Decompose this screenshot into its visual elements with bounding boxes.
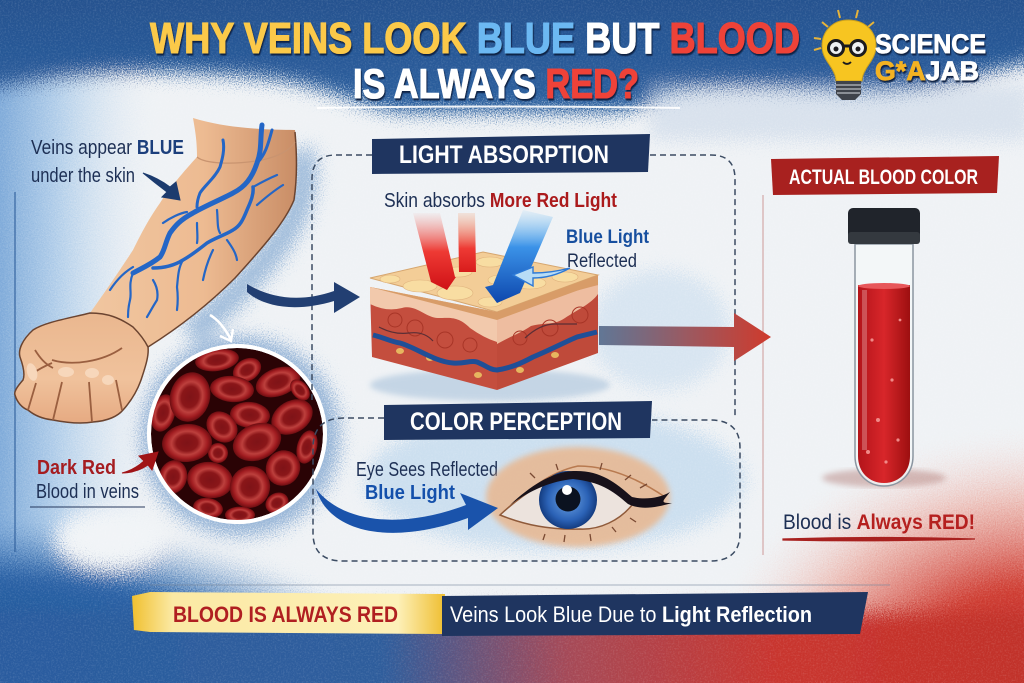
banner: yellow (132, 592, 445, 634)
logo text: G*AJAB (875, 56, 979, 86)
text: eye sees: Eye Sees Reflected (356, 459, 498, 481)
logo text (875, 29, 986, 86)
heading: color perception: COLOR PERCEPTION (410, 408, 622, 436)
icon: fist (15, 313, 148, 423)
heading: color perception (384, 401, 652, 440)
icon: test tube (822, 208, 946, 487)
logo text: SCIENCE (875, 29, 986, 59)
arrow: to veins (143, 173, 180, 200)
icon: forearm (15, 118, 296, 423)
text: blood is always red: Blood is Always RED! (783, 511, 975, 534)
heading: light absorption (372, 134, 650, 174)
panel: actual blood color (763, 156, 999, 555)
text: eye sees (356, 459, 498, 504)
title (150, 14, 800, 107)
banner: navy: Veins Look Blue Due to Light Reflection (450, 602, 812, 627)
label: veins appear blue: under the skin (31, 165, 135, 187)
panel: color perception (313, 401, 740, 561)
text: skin absorbs: Skin absorbs More Red Light (384, 190, 617, 212)
icon: skin cross-section (370, 252, 610, 401)
label: dark red blood in veins (30, 457, 145, 507)
panel: arm with veins (15, 118, 296, 423)
text: blue light reflected: Blue Light (566, 226, 649, 248)
logo: Science Gajab (814, 10, 986, 100)
arrow: arm to light absorption (247, 282, 360, 313)
panel: blood cells circle (146, 315, 325, 523)
title: WHY VEINS LOOK BLUE BUT BLOOD (150, 14, 800, 63)
arrow: white pointer (210, 315, 233, 341)
icon: light bulb (814, 10, 876, 100)
label: veins appear blue (31, 137, 184, 187)
label: dark red blood in veins: Dark Red (37, 457, 116, 479)
banner: yellow: BLOOD IS ALWAYS RED (173, 602, 398, 627)
icon: blue veins (110, 125, 283, 317)
title: IS ALWAYS RED? (353, 60, 639, 107)
label: veins appear blue: Veins appear BLUE (31, 137, 184, 159)
arrow: to eye (316, 489, 498, 533)
label: dark red blood in veins: Blood in veins (36, 481, 139, 503)
arrow: skin to actual blood (599, 313, 771, 361)
arrow: blue reflected (513, 267, 570, 286)
text: eye sees: Blue Light (365, 482, 455, 504)
heading: actual blood color (771, 156, 999, 195)
icon: blue light beam (485, 210, 553, 303)
icon: eye (486, 447, 672, 547)
heading: light absorption: LIGHT ABSORPTION (399, 141, 609, 169)
arrow: label to cells (122, 452, 158, 473)
banner: navy (442, 592, 868, 636)
panel: light absorption (312, 134, 735, 418)
icon: red light beams (413, 213, 476, 290)
text: blue light reflected (566, 226, 649, 272)
text: blue light reflected: Reflected (567, 250, 637, 272)
banner: bottom (132, 592, 868, 636)
